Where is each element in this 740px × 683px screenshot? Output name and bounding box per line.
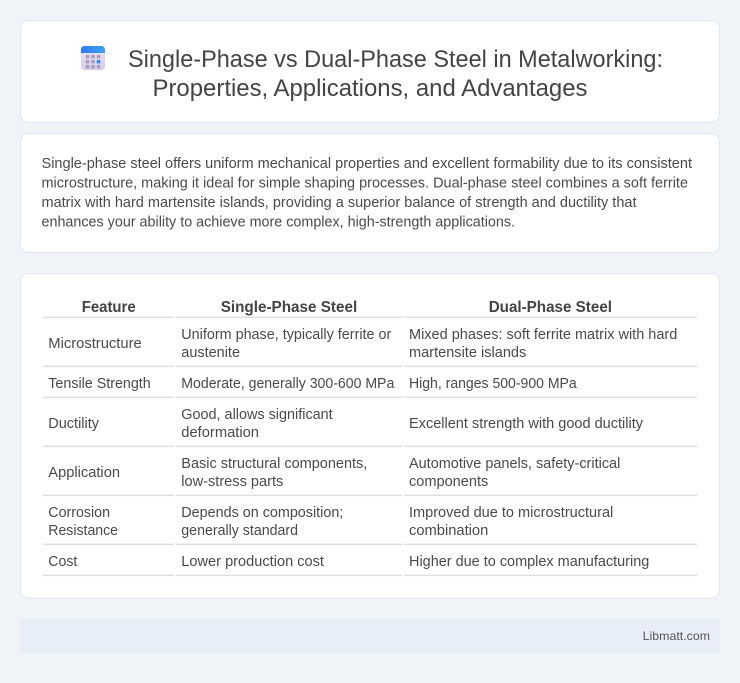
row: microstructure: Microstructure [48, 336, 142, 352]
text block: summary paragraph: Single-phase steel offers uniform mechanical properties and excellent formability due to its consistent [42, 156, 692, 172]
row: ductility [48, 407, 644, 441]
row: application: low-stress parts [181, 474, 283, 490]
row: tensile strength [48, 376, 577, 392]
row: corrosion resistance: Improved due to microstructural [409, 505, 613, 521]
table header row: Dual-Phase Steel [489, 299, 612, 316]
text block: summary paragraph: matrix with hard martensite islands, providing a superior balance of strength and ductility that [42, 195, 636, 211]
text block: summary paragraph: enhances your ability to achieve more complex, high-strength applications. [42, 214, 515, 230]
row: cost: Lower production cost [181, 554, 324, 570]
icon: calendar [81, 46, 105, 70]
text block: summary paragraph [42, 156, 692, 230]
row: corrosion resistance: combination [409, 523, 488, 539]
row: application: components [409, 474, 488, 490]
table header row: Feature [82, 299, 136, 316]
footer: Libmatt.com [643, 629, 710, 643]
panel: comparison table [20, 274, 720, 598]
row: cost [48, 554, 649, 570]
row: tensile strength: Moderate, generally 300-600 MPa [181, 376, 394, 392]
row: ductility: deformation [181, 425, 259, 441]
row: corrosion resistance: Depends on composition; [181, 505, 343, 521]
row: application: Automotive panels, safety-critical [409, 456, 620, 472]
table header row [82, 299, 612, 316]
row: microstructure: Mixed phases: soft ferrite matrix with hard [409, 327, 677, 343]
row: microstructure: martensite islands [409, 345, 526, 361]
row: corrosion resistance [48, 505, 613, 539]
row: cost: Cost [48, 554, 77, 570]
row: ductility: Ductility [48, 416, 100, 432]
footer [20, 619, 720, 653]
row: microstructure: Uniform phase, typically ferrite or [181, 327, 392, 343]
row: microstructure: austenite [181, 345, 240, 361]
row: cost: Higher due to complex manufacturing [409, 554, 649, 570]
text block: summary paragraph: microstructure, making it ideal for simple shaping processes. Dual-phase steel combines a soft ferrite [42, 176, 688, 192]
row: corrosion resistance: Corrosion [48, 505, 110, 521]
row: ductility: Good, allows significant [181, 407, 333, 423]
row: corrosion resistance: generally standard [181, 523, 298, 539]
row: microstructure [48, 327, 677, 361]
panel: header [20, 20, 720, 122]
table header row: Single-Phase Steel [221, 299, 357, 316]
row: application: Basic structural components, [181, 456, 367, 472]
row: ductility: Excellent strength with good ductility [409, 416, 644, 432]
row: corrosion resistance: Resistance [48, 523, 118, 539]
row: application [48, 456, 620, 490]
row: tensile strength: Tensile Strength [48, 376, 151, 392]
title: Single-Phase vs Dual-Phase Steel in Metalworking: [128, 46, 663, 73]
panel: introduction [20, 134, 720, 252]
title: Properties, Applications, and Advantages [152, 75, 588, 102]
row: tensile strength: High, ranges 500-900 MPa [409, 376, 577, 392]
row: application: Application [48, 465, 120, 481]
title [128, 46, 663, 102]
